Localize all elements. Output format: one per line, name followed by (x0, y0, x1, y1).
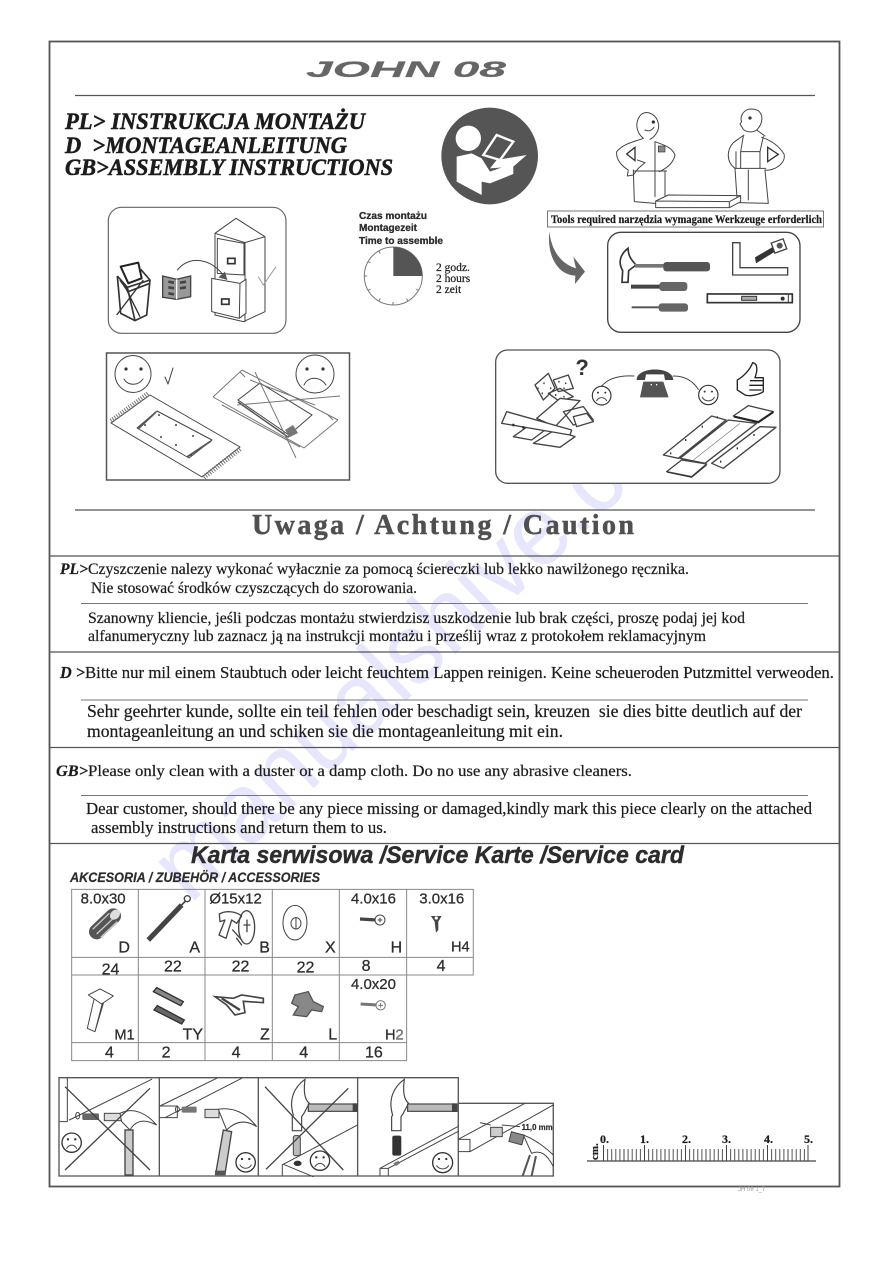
heading: accessories: AKCESORIA / ZUBEHÖR / ACCESSORIES (69, 870, 320, 885)
part labels and counts: 4 (299, 1044, 308, 1061)
text block: polish cleaning: Czyszczenie nalezy wykonać wyłacznie za pomocą ściereczki lub lekko nawilżonego ręcznika. (88, 561, 689, 578)
board (656, 195, 741, 208)
part labels and counts: 4 (437, 958, 446, 975)
part labels and counts: A (189, 940, 200, 957)
part labels and counts: M1 (114, 1027, 135, 1043)
ruler: cm. (589, 1143, 601, 1160)
part labels and counts: B (259, 940, 270, 957)
icon: hammer (620, 248, 710, 282)
part labels and counts: 8 (362, 958, 371, 975)
part labels and counts: 4 (105, 1044, 114, 1061)
part labels and counts: 4 (232, 1044, 241, 1061)
step 5: dowel depth: 11,0 mm (522, 1122, 553, 1132)
text block: polish customer note: Szanowny kliencie, jeśli podczas montażu stwierdzisz uszkodzenie lub brak części, proszę podaj jej kod (88, 610, 745, 627)
arrow to smile (673, 376, 698, 389)
watermark: manualshive.com (128, 332, 742, 921)
part labels and counts: D (118, 940, 130, 957)
icon: dowel D (93, 908, 122, 937)
part labels and counts: 22 (164, 959, 182, 976)
icon: read the manual (441, 108, 538, 204)
panel: hammering instructions (59, 1078, 553, 1177)
part labels and counts: 22 (297, 960, 315, 977)
text block: german cleaning: Bitte nur mil einem Staubtuch oder leicht feuchtem Lappen reinigen. Keine scheueroden Putzmittel verweoden. (85, 663, 834, 682)
panel: tools (608, 232, 800, 332)
icon: square and tape (733, 239, 788, 275)
icon: happy face (115, 356, 151, 392)
part labels and counts: X (325, 940, 336, 957)
check mark (258, 267, 276, 285)
icon: crossed out bin (117, 263, 150, 321)
part labels and counts: L (328, 1026, 337, 1043)
ruler: 3. (722, 1132, 731, 1146)
text block: polish customer note (88, 610, 745, 645)
part labels and counts: H4 (451, 940, 470, 956)
part labels and counts: 4.0x20 (351, 976, 396, 993)
icon: spirit level (707, 294, 792, 303)
time value: 2 hours (436, 273, 471, 285)
icon: question mark: ? (575, 355, 589, 380)
step 1: wrong (60, 1078, 157, 1175)
icon: happy face (699, 385, 718, 405)
scratched panel: incorrect (213, 370, 340, 458)
icon: cap X (283, 905, 307, 940)
icon: screw H2 (361, 1001, 385, 1010)
time value: 2 godz. (436, 262, 470, 274)
heading: assembly instructions: D >MONTAGEANLEITUNG (64, 133, 347, 158)
text block: polish customer note: alfanumeryczny lub zaznacz ją na instrukcji montażu i prześlij wraz z protokołem reklamacyjnym (88, 628, 706, 645)
part labels and counts: Z (260, 1026, 270, 1043)
icon: connector TY (153, 988, 184, 1024)
part labels and counts: 3.0x16 (419, 890, 464, 907)
illustration: two workers with board (617, 109, 784, 208)
heading: caution: Uwaga / Achtung / Caution (252, 510, 634, 541)
text block: english cleaning: GB> (56, 763, 88, 780)
icon: neatly laid out parts (663, 406, 776, 477)
text block: english customer note (86, 799, 813, 837)
arrow to tools (549, 232, 585, 284)
text block: german cleaning: D > (59, 663, 85, 682)
ruler: 4. (764, 1132, 773, 1146)
time label (359, 211, 443, 247)
icon: screwdriver small (632, 303, 688, 312)
part labels and counts (81, 890, 470, 1061)
text block: german customer note (87, 701, 802, 741)
text block: polish cleaning: Nie stosować środków czyszczących do szorowania. (91, 580, 417, 597)
panel: missing parts call (496, 350, 780, 483)
part labels and counts: 4.0x16 (351, 890, 396, 907)
ruler: 5. (804, 1132, 813, 1146)
text block: german customer note: Sehr geehrter kunde, sollte ein teil fehlen oder beschadigt sein, kreuzen sie dies bitte deutlich auf der (87, 701, 802, 721)
worker left (617, 113, 675, 203)
icon: screw H (360, 915, 385, 925)
icon: manual book (163, 276, 191, 299)
step 5: dowel depth (458, 1103, 553, 1176)
panel: work on soft surface (106, 353, 350, 480)
time label: Time to assemble (359, 236, 443, 247)
part labels and counts: H (391, 940, 402, 957)
icon: bracket L (292, 992, 323, 1017)
part labels and counts: TY (183, 1026, 203, 1043)
text block: english customer note: Dear customer, should there be any piece missing or damaged,kindly mark this piece clearly on the attached (86, 799, 813, 818)
icon: screwdriver (631, 282, 687, 291)
text block: english cleaning: Please only clean with a duster or a damp cloth. Do no use any abrasive cleaners. (88, 763, 632, 780)
time label: Montagezeit (359, 223, 418, 234)
table: accessories (72, 889, 473, 1061)
worker right (728, 109, 784, 203)
rug with panel: correct (111, 393, 240, 478)
step 2: right (160, 1078, 257, 1175)
icon: sad face (592, 386, 611, 405)
icon: pile of parts (502, 373, 593, 447)
icon: leg M1 (87, 989, 113, 1032)
part labels and counts: 16 (365, 1044, 383, 1061)
arrow to phone (602, 376, 634, 386)
heading: assembly instructions: GB>ASSEMBLY INSTRUCTIONS (65, 155, 393, 180)
text block: english customer note: assembly instructions and return them to us. (91, 818, 387, 837)
ruler: 1. (640, 1132, 649, 1146)
title: JOHN 08 (306, 57, 508, 82)
part labels and counts: 2 (162, 1044, 171, 1061)
icon: telephone (637, 369, 673, 397)
heading: assembly instructions (64, 108, 393, 180)
icon: hinge Z (215, 995, 263, 1015)
ruler: 0. (600, 1132, 609, 1146)
text block: polish cleaning (60, 561, 689, 597)
page code: JH 08 1_7 (738, 1187, 766, 1193)
step 3: wrong (265, 1079, 358, 1177)
icon: cam fitting B (219, 911, 255, 945)
label: tools required (548, 211, 824, 227)
ruler: 2. (682, 1132, 691, 1146)
step 4: right (380, 1079, 458, 1176)
part labels and counts: 8.0x30 (81, 890, 126, 907)
heading: assembly instructions: PL> INSTRUKCJA MONTAŻU (64, 108, 366, 134)
label: tools required: Tools required narzędzia wymagane Werkzeuge erforderlich (551, 214, 823, 226)
icon: cabinet with open drawer (212, 218, 265, 322)
icon: anchor A (148, 896, 190, 940)
icon: sad face (296, 355, 334, 393)
arrow: manual to drawer (177, 260, 223, 275)
check mark (165, 368, 173, 384)
heading: service card: Karta serwisowa /Service Karte /Service card (191, 842, 685, 869)
time value: 2 zeit (436, 284, 462, 296)
part labels and counts: H2 (385, 1027, 404, 1043)
panel: time to assemble (359, 211, 471, 305)
part labels and counts: 22 (232, 959, 250, 976)
part labels and counts: Ø15x12 (209, 890, 262, 907)
time label: Czas montażu (359, 211, 427, 222)
icon: thumbs up (737, 363, 763, 396)
time value (436, 262, 471, 296)
ruler (587, 1132, 816, 1161)
clock (364, 247, 422, 305)
panel: unpack and keep manual (108, 207, 286, 333)
text block: german customer note: montageanleitung an und schiken sie die montageanleitung mit ein. (87, 721, 563, 741)
text block: polish cleaning: PL> (60, 561, 88, 578)
icon: screw H4 (431, 916, 442, 933)
part labels and counts: 24 (102, 961, 120, 978)
